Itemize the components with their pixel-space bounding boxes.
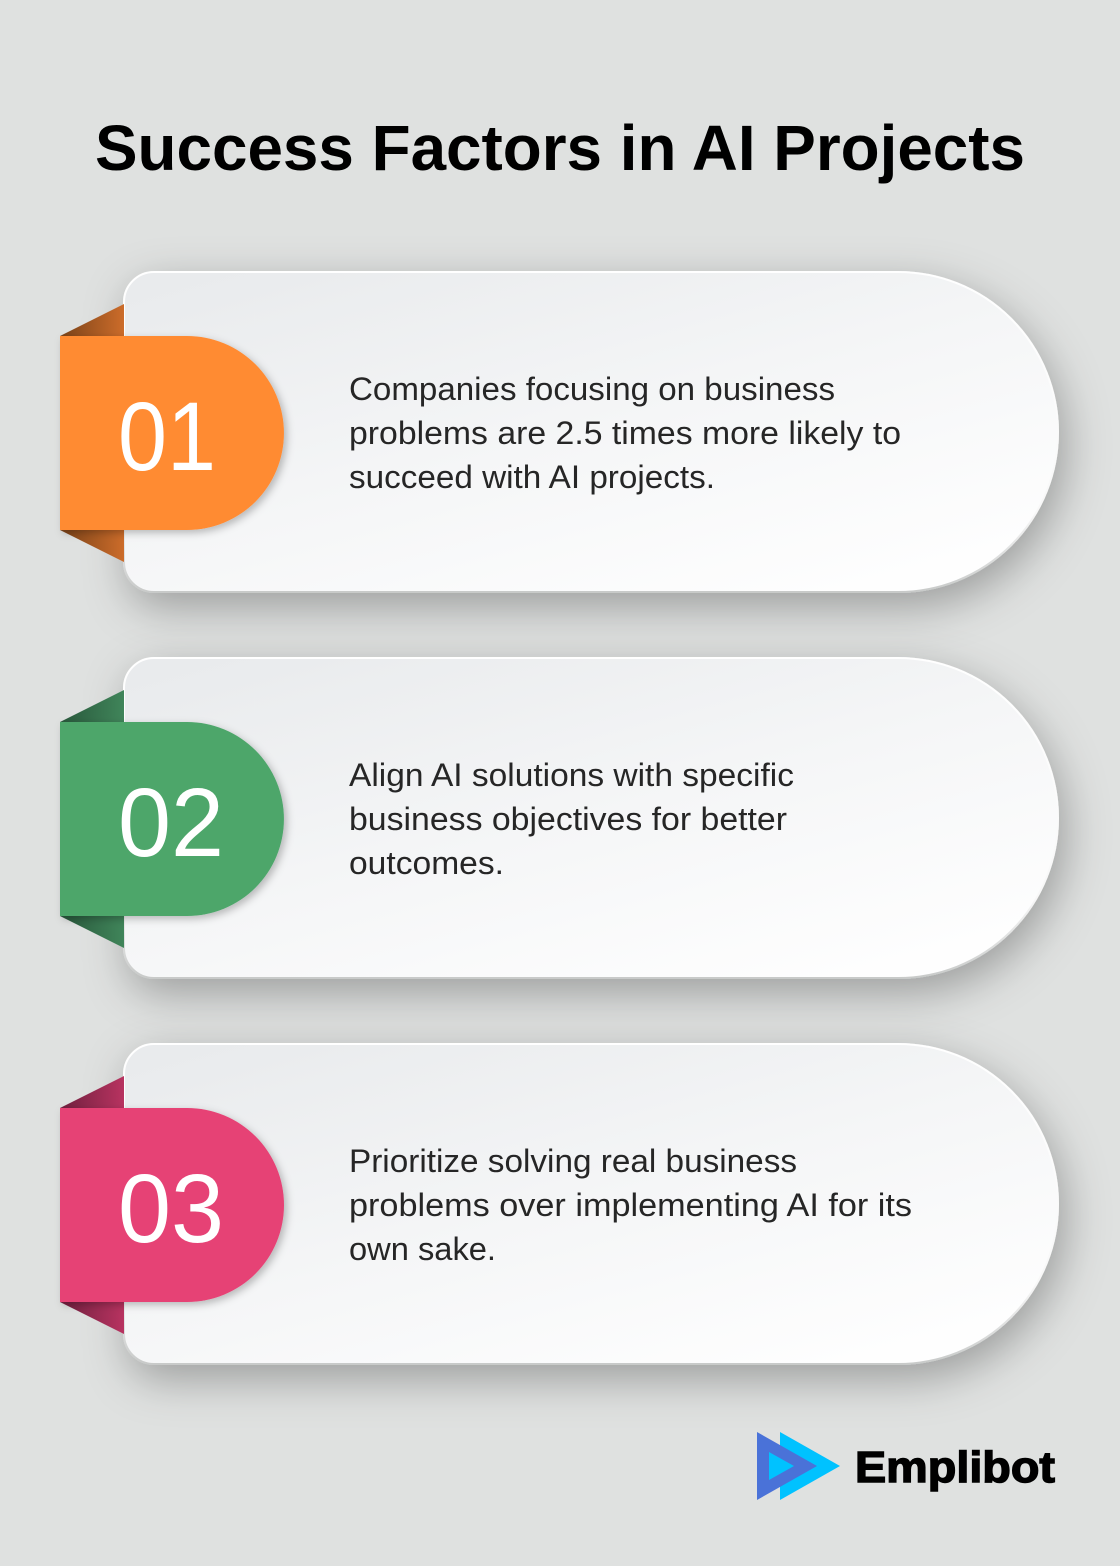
number 03: 03 <box>118 1154 224 1263</box>
text: factor 01: problems are 2.5 times more likely to <box>349 415 901 451</box>
text: factor 03: problems over implementing AI for its <box>349 1187 912 1223</box>
icon: play triangles <box>757 1432 840 1500</box>
text: factor 02: outcomes. <box>349 845 504 881</box>
ribbon fold top 01 <box>60 304 124 336</box>
number badge 02 <box>60 722 284 916</box>
text: factor 01: succeed with AI projects. <box>349 459 715 495</box>
text: factor 03 <box>349 1143 912 1267</box>
panel: factor 03 <box>60 1044 1058 1364</box>
number 01: 01 <box>118 382 216 491</box>
ribbon fold top 03 <box>60 1076 124 1108</box>
wordmark: Emplibot <box>855 1443 1055 1492</box>
ribbon fold top 02 <box>60 690 124 722</box>
panel: factor 02 <box>60 658 1058 978</box>
ribbon fold bottom 02 <box>60 916 124 948</box>
text: factor 03: Prioritize solving real business <box>349 1143 797 1179</box>
card 03 <box>124 1044 1058 1364</box>
text: factor 02: Align AI solutions with specific <box>349 757 794 793</box>
number badge 03 <box>60 1108 284 1302</box>
text: factor 03: own sake. <box>349 1231 496 1267</box>
number badge 01 <box>60 336 284 530</box>
text: factor 01 <box>349 371 901 495</box>
ribbon fold bottom 03 <box>60 1302 124 1334</box>
text: factor 02: business objectives for better <box>349 801 787 837</box>
card 01 <box>124 272 1058 592</box>
panel: factor 01 <box>60 272 1058 592</box>
ribbon fold bottom 01 <box>60 530 124 562</box>
text: factor 02 <box>349 757 794 881</box>
text: factor 01: Companies focusing on business <box>349 371 835 407</box>
logo: Emplibot <box>757 1432 1055 1500</box>
card 02 <box>124 658 1058 978</box>
title: Success Factors in AI Projects <box>95 112 1025 184</box>
number 02: 02 <box>118 768 224 877</box>
